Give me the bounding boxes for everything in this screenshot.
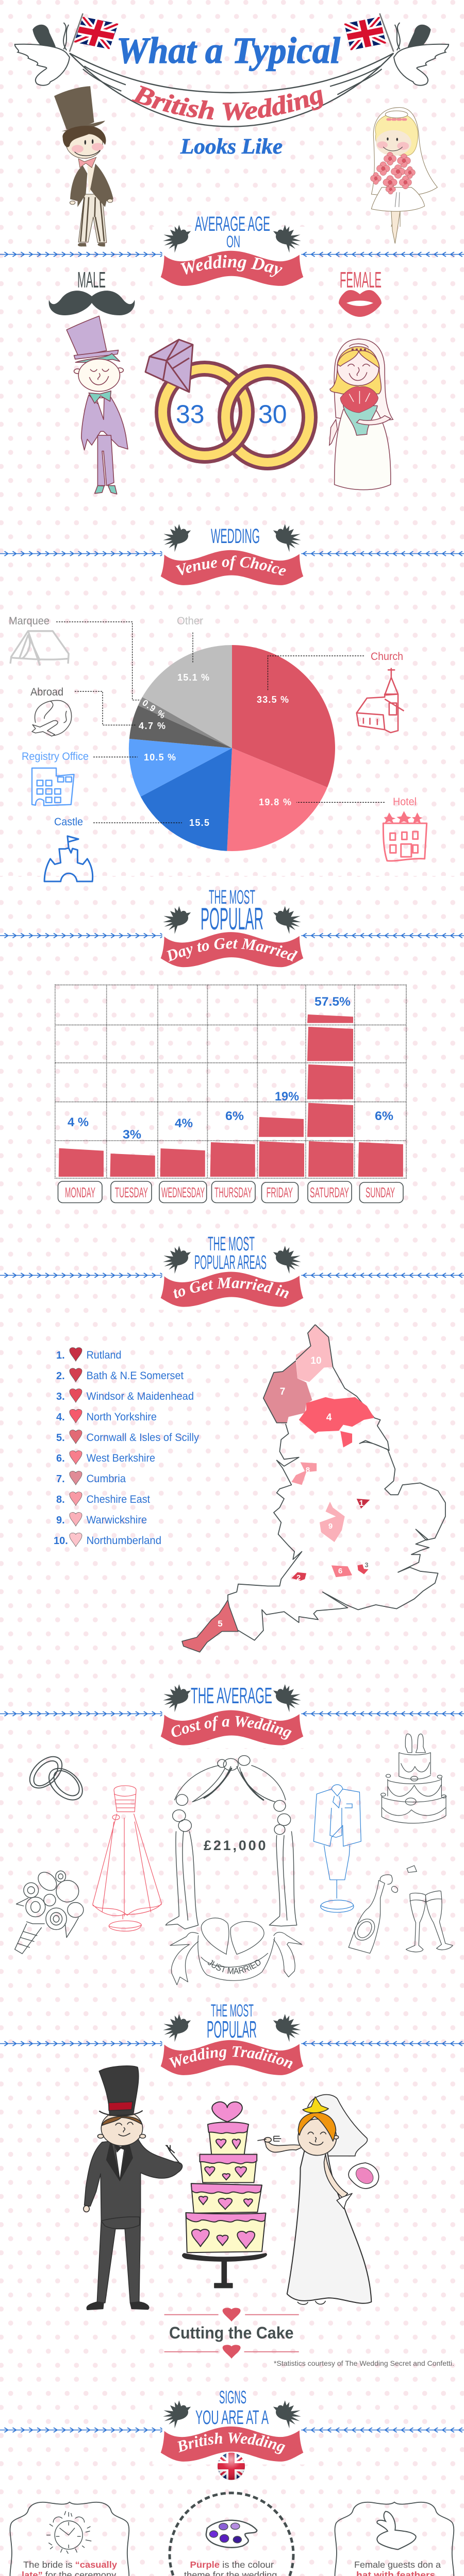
day labels	[58, 1181, 403, 1202]
section header: most popular wedding tradition	[0, 2001, 464, 2075]
banner text: Wedding Day	[180, 255, 283, 277]
map numbers: 7	[280, 1386, 285, 1397]
pie chart: venue of choice	[129, 645, 335, 851]
icon: globe and plane	[32, 700, 72, 736]
bride age: 30	[258, 400, 287, 429]
icon: moustache	[49, 291, 135, 315]
section header: most popular areas: THE MOST	[208, 1233, 255, 1255]
icon: blue suit on stand	[313, 1785, 361, 1912]
slice: church	[232, 645, 335, 787]
illustration: black-tie groom	[84, 2066, 183, 2310]
header text: on: ON	[226, 232, 240, 251]
section header: most popular wedding tradition: POPULAR	[207, 2016, 257, 2043]
ribbon and doves	[15, 13, 449, 127]
header text: you are at a: YOU ARE AT A	[195, 2407, 269, 2429]
ranked list of areas: Cheshire East	[87, 1494, 150, 1505]
map numbers: 2	[296, 1573, 301, 1582]
cutting the cake caption	[164, 2308, 299, 2359]
value labels: 4%	[175, 1116, 193, 1130]
banner text: Venue of Choice	[175, 555, 286, 575]
section header: most popular day to get married: THE MOST	[209, 887, 255, 908]
ranked list of areas: 4.	[56, 1412, 65, 1423]
caption text: Cutting the Cake	[169, 2324, 294, 2342]
label: marquee: Marquee	[9, 615, 49, 627]
map numbers: 4	[326, 1412, 332, 1423]
map numbers: 10	[310, 1355, 322, 1366]
icon: alarm clock	[47, 2512, 91, 2553]
groom age: 33	[176, 400, 205, 429]
banner text: to Get Married in	[173, 1277, 289, 1298]
day labels: SUNDAY	[366, 1184, 395, 1200]
value labels: 19%	[275, 1090, 299, 1104]
ranked list of areas: 2.	[56, 1370, 65, 1382]
right union flag	[344, 16, 386, 50]
icon: church	[357, 668, 404, 733]
values: 10.5 %	[144, 752, 176, 762]
banner text: British Wedding	[177, 2433, 286, 2454]
leader lines	[56, 622, 385, 823]
values: 33.5 %	[257, 694, 289, 705]
ranked list of areas: Warwickshire	[87, 1514, 147, 1526]
map numbers: 6	[338, 1567, 342, 1575]
values: 19.8 %	[259, 797, 291, 807]
values: 15.5	[189, 818, 209, 828]
left union flag	[74, 16, 119, 49]
icon: lips	[339, 290, 382, 317]
section header: wedding venue of choice: WEDDING	[211, 525, 260, 548]
map numbers: 8	[306, 1466, 310, 1475]
ranked list of areas: 5.	[56, 1432, 65, 1444]
slice: marquee	[138, 697, 232, 748]
banner text: Day to Get Married	[167, 938, 298, 962]
icon: hotel	[383, 823, 427, 861]
label: hotel: Hotel	[393, 796, 417, 808]
icon: champagne bottle	[349, 1866, 417, 1953]
statistics source note: *Statistics courtesy of The Wedding Secret and Confetti.	[274, 2359, 454, 2367]
icon: hotel stars	[384, 811, 423, 823]
value labels: 3%	[123, 1128, 141, 1142]
map numbers: 9	[328, 1522, 333, 1531]
heading: what a typical: What a Typical	[117, 30, 340, 71]
ranked list of areas: West Berkshire	[87, 1452, 155, 1464]
values: 4.7 %	[139, 721, 165, 731]
card text: Female guests don a	[354, 2560, 441, 2570]
ranked list of areas: Rutland	[87, 1349, 121, 1361]
ranked list of areas: 10.	[54, 1535, 68, 1547]
label: registry office: Registry Office	[22, 751, 89, 762]
icon: wedding rings outline	[23, 1753, 89, 1803]
ranked list of areas: North Yorkshire	[87, 1411, 157, 1423]
section header: most popular wedding tradition: THE MOST	[211, 2001, 254, 2021]
icon: diamond	[145, 340, 193, 392]
map numbers	[218, 1355, 369, 1629]
slice: other	[142, 645, 232, 748]
heading: british wedding: British Wedding	[131, 86, 323, 121]
values: 0.9 %	[140, 698, 167, 721]
cost figure: £21,000	[204, 1838, 266, 1853]
banner text: Cost of a Wedding	[171, 1716, 292, 1740]
card: bride casually late	[10, 2502, 129, 2576]
ranked list of areas: 8.	[56, 1494, 65, 1505]
card: hat with feathers	[335, 2502, 454, 2576]
icon: red dress on stand	[93, 1786, 161, 1931]
ranked list of areas	[54, 1348, 199, 1547]
icon: union flag ball	[218, 2452, 245, 2480]
list hearts	[70, 1348, 82, 1547]
ranked list of areas: 3.	[56, 1391, 65, 1402]
illustration: bride with veil and fork	[257, 2095, 379, 2304]
values	[139, 672, 291, 828]
card text: The bride is “casually	[23, 2560, 117, 2570]
section header: most popular areas: POPULAR AREAS	[194, 1252, 267, 1274]
icon: tiered wedding cake outline	[381, 1734, 446, 1823]
day labels: SATURDAY	[310, 1184, 349, 1200]
day labels: MONDAY	[65, 1184, 95, 1200]
slice: castle	[141, 748, 232, 851]
section header: average age on wedding day	[0, 213, 464, 286]
icon: feathered hat	[377, 2512, 416, 2549]
ranked list of areas: Cumbria	[87, 1473, 126, 1485]
values: 15.1 %	[177, 672, 209, 683]
slice: abroad	[129, 705, 232, 748]
section header: most popular day to get married	[0, 887, 464, 968]
ranked list of areas: Windsor & Maidenhead	[87, 1391, 194, 1402]
label: church: Church	[371, 651, 403, 663]
banner text: Wedding Tradition	[169, 2046, 293, 2069]
bars	[59, 1014, 403, 1177]
label: abroad: Abroad	[30, 686, 63, 698]
illustration: interlocked gold rings	[145, 340, 309, 463]
heading: looks like: Looks Like	[180, 135, 283, 159]
lips highlight	[346, 301, 373, 306]
card: purple colour theme	[170, 2493, 293, 2576]
value labels: 57.5%	[314, 995, 351, 1009]
label: castle: Castle	[54, 816, 83, 828]
icon: paint palette	[206, 2520, 257, 2548]
header text: average age: AVERAGE AGE	[195, 213, 270, 235]
section header: signs you are at a british wedding: SIGNS	[219, 2387, 246, 2408]
map numbers: 3	[364, 1561, 369, 1569]
map outline and regions	[182, 1325, 445, 1652]
value labels: 4 %	[68, 1115, 89, 1129]
ranked list of areas: Northumberland	[87, 1535, 161, 1547]
icon: tent	[10, 631, 69, 666]
illustration: brown groom	[54, 86, 113, 246]
text: FEMALE	[340, 267, 382, 293]
icon: office building	[32, 768, 74, 806]
title block	[14, 13, 450, 159]
illustration: veiled bride with red bouquet	[329, 339, 393, 490]
day labels: THURSDAY	[214, 1184, 252, 1200]
map numbers: 5	[218, 1619, 223, 1629]
slice: registry office	[129, 739, 232, 796]
heart divider	[164, 2308, 299, 2359]
bar chart: day of week	[55, 985, 406, 1202]
section header: most popular day to get married: POPULAR	[201, 902, 263, 936]
ranked list of areas: Cornwall & Isles of Scilly	[87, 1432, 199, 1444]
icon: floral arch	[165, 1756, 297, 1929]
value labels: 6%	[225, 1109, 244, 1123]
text: MALE	[77, 267, 106, 293]
map numbers: 1	[359, 1499, 364, 1508]
icon: sandcastle	[44, 836, 93, 882]
illustration: purple groom	[67, 316, 128, 494]
icon: rose bouquet	[15, 1871, 84, 1954]
chart grid	[55, 985, 406, 1178]
illustration: white bride with pink bouquet	[371, 108, 437, 244]
map of england	[182, 1325, 445, 1652]
header text: the average: THE AVERAGE	[191, 1683, 272, 1708]
day labels: WEDNESDAY	[161, 1184, 205, 1200]
label: other: Other	[177, 615, 203, 627]
illustration: pink heart wedding cake	[183, 2102, 267, 2287]
ranked list of areas: Bath & N.E Somerset	[87, 1370, 184, 1382]
day labels: FRIDAY	[267, 1184, 293, 1200]
slice: hotel	[227, 748, 327, 851]
ribbon text: JUST MARRIED	[208, 1960, 261, 1974]
section header: wedding venue of choice	[0, 524, 464, 585]
day labels: TUESDAY	[115, 1184, 148, 1200]
section header: signs you are at a british wedding	[0, 2387, 464, 2465]
section header: most popular areas	[0, 1233, 464, 1310]
ranked list of areas: 9.	[56, 1515, 65, 1526]
icon: champagne glasses	[406, 1891, 453, 1952]
ranked list of areas: 6.	[56, 1453, 65, 1464]
section header: average cost	[0, 1683, 464, 1749]
ranked list of areas: 1.	[56, 1350, 65, 1361]
value labels: 6%	[375, 1109, 393, 1123]
value labels	[68, 995, 393, 1142]
ranked list of areas: 7.	[56, 1473, 65, 1485]
icon: just married ribbon	[170, 1918, 302, 1986]
card text: Purple is the colour	[190, 2560, 274, 2570]
